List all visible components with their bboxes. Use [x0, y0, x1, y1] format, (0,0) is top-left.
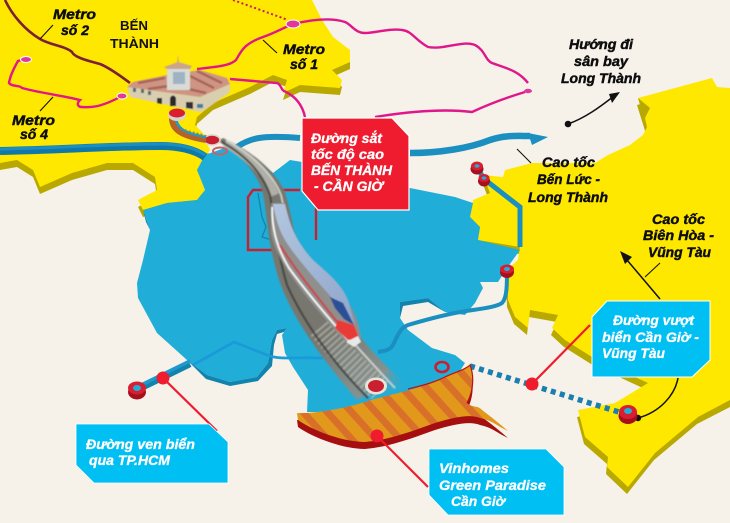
label: Bến Thành: THÀNH	[110, 36, 159, 51]
callout: coastal road: qua TP.HCM	[89, 453, 171, 468]
callout: Vinhomes Green Paradise: Cần Giờ	[451, 494, 507, 509]
callout: coastal road: Đường ven biển	[86, 437, 195, 452]
callout: high-speed railway: - CẦN GIỜ	[314, 179, 385, 194]
road: Bến Lức link	[470, 162, 520, 278]
Vũng Tàu station marker	[618, 405, 638, 424]
high-speed train	[271, 203, 361, 347]
Cần Giờ - Vũng Tàu sea crossing	[436, 362, 622, 413]
label: Bến Lức - Long Thành expressway: Bến Lức -	[537, 171, 600, 187]
label: Metro số 4: số 4	[20, 126, 48, 142]
callout: sea crossing	[592, 301, 710, 377]
callout: high-speed railway: Đường sắt	[311, 131, 383, 146]
callout: Vinhomes Green Paradise: Green Paradise	[439, 478, 547, 493]
label: Metro số 2: số 2	[61, 22, 89, 38]
railway station markers	[204, 135, 387, 394]
label: Metro số 1	[283, 41, 325, 72]
label: Bến Lức - Long Thành expressway	[528, 154, 608, 205]
label: Biên Hòa - Vũng Tàu expressway: Vũng Tàu	[648, 244, 711, 260]
metro line 2	[5, 0, 130, 83]
railway track	[218, 138, 407, 400]
Vinhomes Green Paradise zone	[297, 365, 508, 449]
label: Long Thành airport: Long Thành	[561, 70, 641, 86]
label: Bến Thành	[110, 18, 159, 51]
label: Metro số 1: số 1	[290, 56, 318, 72]
label: Metro số 4: Metro	[12, 112, 55, 128]
metro line 4	[9, 56, 127, 107]
road: coastal	[128, 270, 507, 400]
crossing marker dot	[526, 378, 538, 390]
label tick lines	[40, 25, 660, 277]
callout: high-speed railway	[302, 118, 409, 210]
label: Metro số 2: Metro	[53, 6, 96, 22]
road: western band	[0, 144, 205, 157]
callout: high-speed railway: BẾN THÀNH	[311, 163, 392, 178]
metro line 1	[197, 0, 532, 117]
label: Bến Lức - Long Thành expressway: Long Thành	[528, 189, 608, 205]
label: Long Thành airport	[561, 36, 641, 86]
leader lines	[163, 325, 590, 487]
label: Biên Hòa - Vũng Tàu expressway: Cao tốc	[652, 211, 705, 227]
arrow: Long Thành airport direction	[565, 92, 620, 127]
red frame	[248, 190, 316, 250]
road: Bến Lức - Long Thành	[237, 133, 548, 153]
callout: Vinhomes Green Paradise: Vinhomes	[439, 461, 510, 476]
label: Long Thành airport: sân bay	[574, 53, 629, 69]
rail link from the station	[168, 108, 207, 140]
label: Metro số 2	[53, 6, 96, 38]
callout: coastal road	[76, 424, 228, 483]
label: Metro số 4	[12, 112, 55, 142]
Bến Thành market building	[127, 55, 230, 112]
callout: sea crossing: Vũng Tàu	[602, 346, 666, 361]
arrow: expressway into Vũng Tàu	[635, 378, 678, 421]
arrow: Biên Hòa - Vũng Tàu direction	[620, 251, 660, 299]
label: Bến Thành: BẾN	[120, 18, 148, 33]
map: northern land	[0, 0, 350, 217]
label: Bến Lức - Long Thành expressway: Cao tốc	[542, 154, 595, 170]
callout: sea crossing: biển Cần Giờ -	[602, 330, 700, 345]
map: water	[137, 145, 520, 412]
label: Metro số 1: Metro	[283, 41, 325, 57]
label: Long Thành airport: Hướng đi	[569, 36, 634, 52]
map: eastern land	[469, 78, 730, 494]
label: Biên Hòa - Vũng Tàu expressway: Biên Hòa -	[643, 227, 714, 243]
callout: sea crossing: Đường vượt	[613, 313, 695, 328]
label: Biên Hòa - Vũng Tàu expressway	[643, 211, 714, 260]
callout: Vinhomes Green Paradise	[429, 449, 564, 515]
callout: high-speed railway: tốc độ cao	[311, 147, 384, 162]
